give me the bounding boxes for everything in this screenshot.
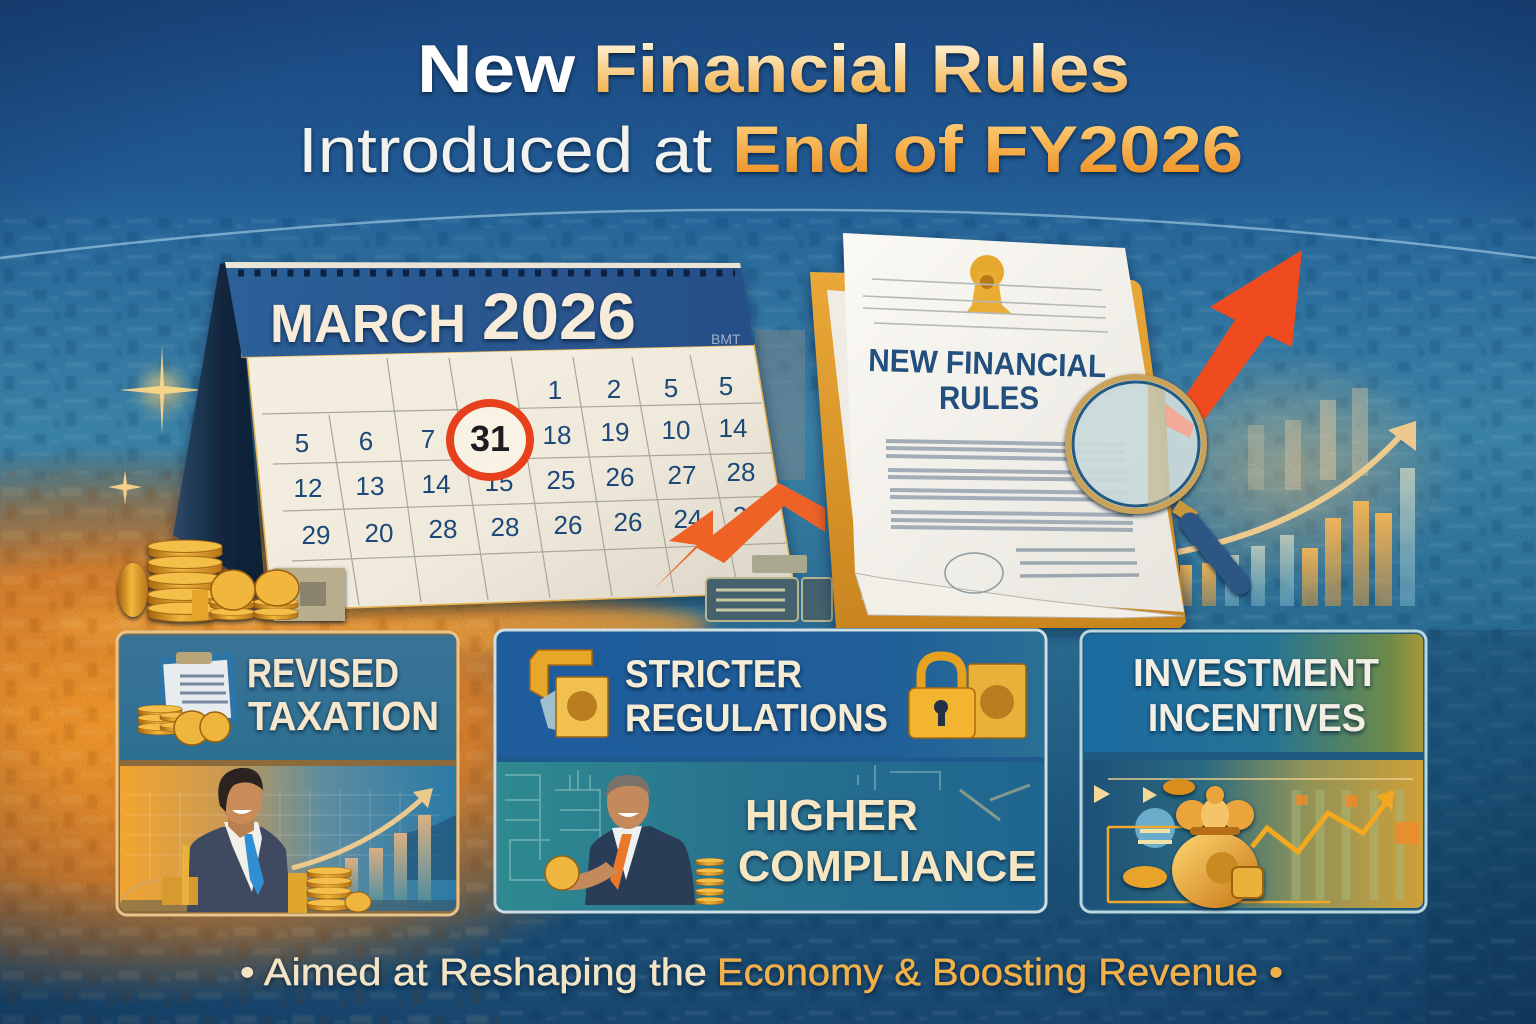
document text lines bbox=[863, 279, 1139, 576]
calendar stand bbox=[173, 262, 265, 592]
calendar page bbox=[238, 262, 795, 608]
panel heading bbox=[625, 653, 888, 740]
calendar dates: 26 bbox=[554, 510, 582, 540]
title: Financial Rules bbox=[593, 31, 1130, 107]
calendar dates: 10 bbox=[662, 415, 690, 445]
calendar dates: 13 bbox=[356, 471, 384, 501]
icon: gold money pot bbox=[1123, 779, 1263, 908]
calendar dates bbox=[294, 371, 755, 550]
seal emblem bbox=[966, 255, 1011, 313]
decorative horizon arc bbox=[0, 210, 1536, 258]
panel: investment incentives bbox=[1081, 631, 1426, 912]
coin pile bbox=[118, 540, 345, 622]
calendar dates: 27 bbox=[668, 460, 696, 490]
calendar dates: 29 bbox=[302, 520, 330, 550]
calendar dates: 18 bbox=[543, 420, 571, 450]
coin stack bbox=[696, 858, 724, 905]
panel heading: TAXATION bbox=[248, 693, 439, 739]
calendar dates: 2 bbox=[607, 374, 621, 404]
calendar dates: 5 bbox=[664, 373, 678, 403]
document heading: NEW FINANCIAL bbox=[868, 342, 1107, 384]
folder bbox=[810, 272, 1186, 628]
highlighted date 31 bbox=[450, 403, 530, 477]
panel bottom bbox=[120, 766, 456, 911]
front sheet bbox=[843, 233, 1184, 612]
icon: padlock and gold plate bbox=[909, 656, 1026, 738]
calendar dates: 24 bbox=[674, 504, 702, 534]
title: Introduced at bbox=[298, 114, 712, 186]
calendar month bbox=[270, 279, 636, 354]
folded paper corner bbox=[855, 573, 1184, 618]
panel heading: INVESTMENT bbox=[1133, 652, 1379, 695]
calendar dates: 2 bbox=[733, 501, 747, 531]
calendar grid bbox=[262, 355, 788, 605]
background skyline sketch bbox=[505, 765, 1030, 880]
calendar small tag: BMT bbox=[711, 331, 741, 347]
panel heading: STRICTER bbox=[625, 653, 802, 696]
title: New bbox=[417, 31, 576, 107]
document heading: RULES bbox=[939, 380, 1039, 416]
orange arrow beside calendar bbox=[653, 483, 825, 590]
calendar month: 2026 bbox=[482, 279, 636, 353]
icon: gold folder clamp bbox=[530, 650, 608, 737]
panel top bbox=[1084, 634, 1423, 752]
panel heading bbox=[738, 791, 1037, 891]
calendar dates: 25 bbox=[547, 465, 575, 495]
background growth chart, right bbox=[1178, 421, 1416, 606]
document with folder bbox=[810, 233, 1186, 628]
back sheet bbox=[827, 290, 905, 600]
calendar dates: 28 bbox=[727, 457, 755, 487]
calendar dates: 14 bbox=[422, 469, 450, 499]
panel: stricter regulations and higher compliance bbox=[495, 630, 1046, 912]
calendar dates: 28 bbox=[491, 512, 519, 542]
calendar dates: 20 bbox=[365, 518, 393, 548]
panel bottom bbox=[1084, 760, 1423, 908]
magnifying glass bbox=[1068, 377, 1240, 584]
person bbox=[545, 775, 695, 905]
calendar dates: 28 bbox=[429, 514, 457, 544]
document heading bbox=[868, 342, 1107, 416]
chart axes and line bbox=[1094, 779, 1419, 902]
calendar dates: 26 bbox=[606, 462, 634, 492]
calendar dates: 14 bbox=[719, 413, 747, 443]
calendar dates: 5 bbox=[719, 371, 733, 401]
coin stacks bbox=[162, 845, 371, 913]
chart bbox=[120, 788, 456, 911]
calendar dates: 26 bbox=[614, 507, 642, 537]
big red arrow bbox=[1186, 250, 1302, 420]
calendar dates: 1 bbox=[548, 375, 562, 405]
calendar bbox=[173, 262, 795, 608]
calendar dates: 15 bbox=[485, 467, 513, 497]
panel heading bbox=[247, 650, 439, 739]
panel: revised taxation bbox=[117, 632, 458, 915]
calendar dates: 6 bbox=[359, 426, 373, 456]
panel heading: COMPLIANCE bbox=[738, 842, 1037, 891]
calendar header bbox=[225, 262, 754, 357]
calendar dates: 5 bbox=[295, 428, 309, 458]
small boxes below arrow bbox=[706, 555, 832, 621]
footer tagline bbox=[240, 952, 1283, 994]
panel bottom bbox=[497, 762, 1044, 910]
calendar dates: 19 bbox=[601, 417, 629, 447]
calendar month: MARCH bbox=[270, 294, 466, 354]
highlighted date 31: 31 bbox=[470, 418, 510, 459]
panel heading: REVISED bbox=[247, 650, 399, 696]
footer tagline: Economy & Boosting Revenue • bbox=[717, 952, 1283, 994]
title bbox=[298, 31, 1243, 186]
panel top bbox=[120, 635, 456, 760]
calendar dates: 12 bbox=[294, 473, 322, 503]
panel heading: REGULATIONS bbox=[625, 697, 888, 740]
calendar spiral binding bbox=[225, 262, 741, 273]
panel heading: INCENTIVES bbox=[1148, 697, 1366, 740]
panel heading: HIGHER bbox=[745, 791, 918, 840]
stamp bbox=[945, 553, 1003, 593]
person bbox=[187, 768, 291, 912]
title: End of FY2026 bbox=[732, 112, 1243, 186]
icon: clipboard with coins bbox=[138, 652, 238, 745]
calendar dates: 7 bbox=[421, 424, 435, 454]
footer tagline: • Aimed at Reshaping the bbox=[240, 952, 707, 994]
panel top bbox=[497, 632, 1044, 757]
panel heading bbox=[1133, 652, 1379, 740]
